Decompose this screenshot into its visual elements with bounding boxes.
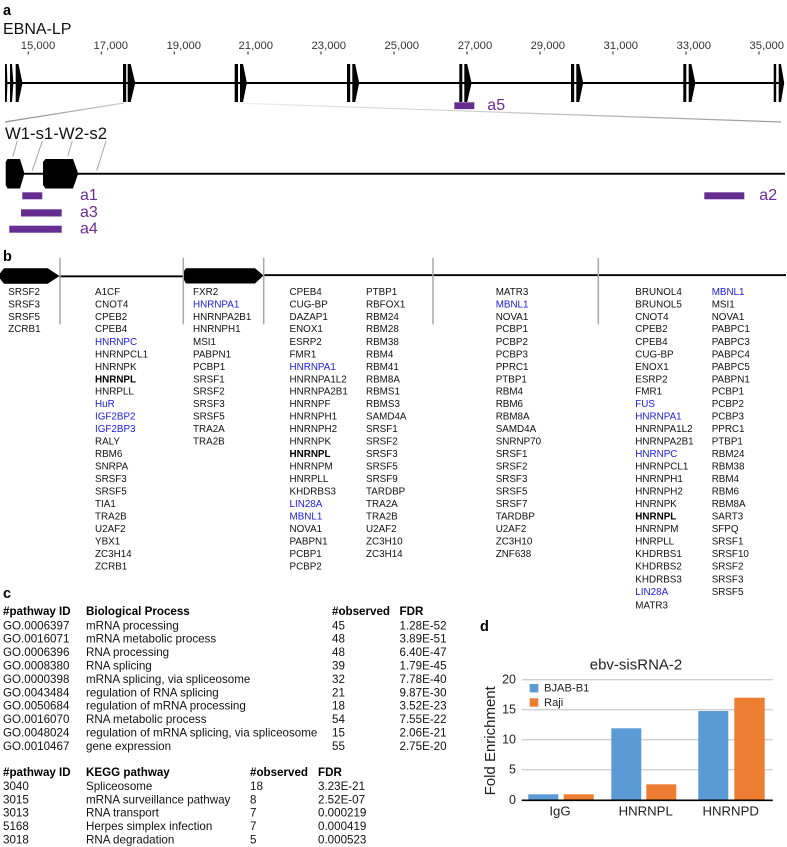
- gene list column 3: TRA2A: [193, 424, 225, 435]
- gene list column 8: RBM8A: [712, 499, 746, 510]
- panel label b: b: [3, 249, 12, 265]
- table: biological process enrichment: Biological Process: [86, 605, 190, 618]
- table: KEGG pathway enrichment: 7: [250, 820, 256, 833]
- table: KEGG pathway enrichment: 3.23E-21: [318, 780, 365, 793]
- gene list column 6: [496, 287, 542, 560]
- gene list column 8: [712, 287, 750, 598]
- gene list column 2: YBX1: [95, 536, 120, 547]
- gene list column 3: PCBP1: [193, 362, 225, 373]
- gene list column 6: MATR3: [496, 287, 529, 298]
- gene list column 5: SRSF2: [366, 437, 398, 448]
- table: biological process enrichment: 48: [332, 633, 345, 646]
- gene list column 7: BRUNOL4: [635, 287, 682, 298]
- table: biological process enrichment: 48: [332, 646, 345, 659]
- gene list column 5: RBM8A: [366, 374, 400, 385]
- gene list column 6: ZC3H10: [496, 536, 533, 547]
- table: biological process enrichment: regulation of mRNA splicing, via spliceosome: [86, 726, 317, 740]
- genome coordinate axis: 25,000: [384, 40, 419, 52]
- gene list column 2: ZCRB1: [95, 561, 127, 572]
- gene list column 6: MBNL1: [496, 300, 529, 310]
- y axis labels: 10: [502, 732, 516, 746]
- gene list column 8: PPRC1: [712, 424, 745, 435]
- y axis labels: 0: [509, 793, 516, 807]
- table: biological process enrichment: 18: [332, 700, 345, 713]
- x axis labels: HNRNPL: [619, 804, 673, 819]
- table: KEGG pathway enrichment: 0.000419: [318, 820, 366, 833]
- zoomed exon track W1 W2: [6, 159, 785, 188]
- table: biological process enrichment: regulation of mRNA processing: [86, 700, 246, 713]
- gene list column 2: IGF2BP2: [95, 412, 136, 423]
- gene list column 3: FXR2: [193, 287, 218, 298]
- gene list column 6: PCBP1: [496, 324, 528, 335]
- gene list column 8: SART3: [712, 512, 744, 522]
- gene list column 3: HNRNPH1: [193, 324, 241, 335]
- marker a2: [704, 187, 777, 204]
- gene list column 6: SRSF1: [496, 449, 527, 460]
- table: biological process enrichment: 3.89E-51: [400, 633, 447, 646]
- table: biological process enrichment: [3, 605, 447, 753]
- gene list column 5: [366, 287, 407, 560]
- table: biological process enrichment: GO.0043484: [3, 686, 70, 699]
- legend: Raji: [544, 697, 563, 709]
- gene list column 8: SFPQ: [712, 524, 739, 535]
- table: biological process enrichment: regulation of RNA splicing: [86, 686, 219, 699]
- gene list column 7: HNRNPL: [635, 512, 676, 522]
- table: KEGG pathway enrichment: Spliceosome: [86, 780, 152, 793]
- gene list column 3: TRA2B: [193, 437, 225, 448]
- gene list column 8: RBM38: [712, 462, 745, 473]
- table: biological process enrichment: GO.0048024: [3, 726, 70, 740]
- gene list column 7: ENOX1: [635, 362, 669, 373]
- genome coordinate axis: 27,000: [458, 40, 492, 52]
- gene list column 6: SRSF3: [496, 474, 528, 485]
- markers a1 a3 a4: a4: [80, 220, 98, 238]
- gene list column 2: ZC3H14: [95, 549, 132, 560]
- panel label c: c: [3, 586, 11, 602]
- gene list column 4: NOVA1: [290, 524, 322, 535]
- gene list column 1: [8, 287, 41, 335]
- markers a1 a3 a4: a3: [80, 204, 98, 221]
- gene list column 2: CPEB4: [95, 324, 128, 335]
- gene list column 2: U2AF2: [95, 524, 126, 535]
- gene list column 4: PCBP1: [290, 549, 322, 560]
- gene list column 6: SNRNP70: [496, 437, 542, 448]
- gene list column 3: HNRNPA2B1: [193, 312, 251, 323]
- table: biological process enrichment: 21: [332, 686, 345, 699]
- gene list column 3: SRSF5: [193, 412, 225, 423]
- gene list column 4: PCBP2: [290, 561, 322, 572]
- gene list column 8: SRSF1: [712, 536, 743, 547]
- genome coordinate axis: 19,000: [166, 40, 201, 52]
- gene list column 4: CUG-BP: [290, 300, 328, 310]
- gene list column 2: HuR: [95, 399, 115, 410]
- gene list column 6: PCBP2: [496, 337, 528, 348]
- gene list column 3: SRSF1: [193, 374, 225, 385]
- table: biological process enrichment: 1.28E-52: [400, 619, 447, 632]
- gene list column 8: RBM6: [712, 486, 740, 498]
- gene list column 6: SRSF7: [496, 499, 527, 510]
- table: biological process enrichment: mRNA processing: [86, 619, 179, 632]
- gene list column 8: PABPN1: [712, 374, 750, 385]
- gene list column 4: FMR1: [290, 349, 316, 360]
- gene list column 7: KHDRBS3: [635, 574, 682, 585]
- gene list column 7: HNRNPA2B1: [635, 437, 694, 448]
- gene list column 5: RBM38: [366, 337, 399, 348]
- gene list column 8: SRSF5: [712, 587, 744, 598]
- gene list column 8: NOVA1: [712, 312, 744, 323]
- x axis labels: [549, 804, 759, 819]
- gene list column 7: FUS: [635, 399, 655, 410]
- gene list column 5: ZC3H14: [366, 549, 403, 560]
- table: biological process enrichment: 2.75E-20: [400, 740, 447, 753]
- gene list column 7: ESRP2: [635, 374, 668, 385]
- gene list column 5: TARDBP: [366, 486, 406, 498]
- gene list column 2: CNOT4: [95, 300, 129, 310]
- gene list column 2: SRSF5: [95, 486, 127, 498]
- gene list column 6: RBM4: [496, 387, 524, 398]
- x axis labels: IgG: [549, 804, 571, 819]
- table: biological process enrichment: GO.0010467: [3, 740, 69, 753]
- gene list column 5: TRA2B: [366, 512, 398, 522]
- gene list column 5: RBFOX1: [366, 300, 405, 310]
- gene list column 3: [193, 287, 251, 448]
- gene list column 7: HNRNPM: [635, 524, 679, 535]
- gene list column 2: SNRPA: [95, 462, 129, 473]
- gene list column 5: SRSF1: [366, 424, 398, 435]
- gene list column 1: SRSF2: [8, 287, 40, 298]
- gene list column 7: BRUNOL5: [635, 300, 682, 310]
- gene list column 5: SRSF3: [366, 449, 398, 460]
- gene list column 2: HNRNPCL1: [95, 349, 148, 360]
- table: biological process enrichment: GO.0016070: [3, 713, 69, 726]
- panel label d: d: [480, 619, 489, 635]
- table: biological process enrichment: 45: [332, 619, 345, 632]
- gene list column 2: SRSF3: [95, 474, 127, 485]
- gene list column 6: ZNF638: [496, 549, 532, 560]
- table: biological process enrichment: 32: [332, 673, 345, 686]
- gene list column 5: PTBP1: [366, 287, 397, 298]
- gene list column 4: HNRNPA1: [290, 362, 336, 373]
- table: KEGG pathway enrichment: 8: [250, 793, 256, 806]
- y axis labels: 20: [502, 672, 516, 686]
- table: KEGG pathway enrichment: KEGG pathway: [86, 766, 170, 779]
- table: biological process enrichment: RNA metabolic process: [86, 713, 207, 726]
- gene list column 7: HNRNPA1L2: [635, 424, 693, 435]
- gene list column 8: PCBP1: [712, 387, 744, 398]
- table: biological process enrichment: mRNA splicing, via spliceosome: [86, 673, 250, 686]
- gene list column 5: RBM28: [366, 324, 399, 335]
- gene list column 4: HNRNPA2B1: [290, 387, 348, 398]
- gene list column 4: PABPN1: [290, 536, 328, 547]
- gene list column 4: HNRNPA1L2: [290, 374, 347, 385]
- gene list column 2: CPEB2: [95, 312, 127, 323]
- bars: [528, 698, 765, 800]
- gene list column 7: LIN28A: [635, 587, 669, 598]
- gene list column 5: SRSF9: [366, 474, 398, 485]
- gene list column 8: SRSF10: [712, 549, 749, 560]
- gene list column 5: TRA2A: [366, 499, 398, 510]
- gene list column 2: HNRNPK: [95, 362, 137, 373]
- gene list column 7: FMR1: [635, 387, 662, 398]
- table: biological process enrichment: GO.0050684: [3, 700, 70, 713]
- gene list column 6: SRSF2: [496, 462, 527, 473]
- gene list column 4: MBNL1: [290, 512, 322, 522]
- gene list column 3: SRSF3: [193, 399, 225, 410]
- gene list column 7: CNOT4: [635, 312, 669, 323]
- table: KEGG pathway enrichment: [3, 766, 366, 846]
- y axis labels: 15: [502, 702, 516, 716]
- table: KEGG pathway enrichment: 3015: [3, 793, 29, 806]
- gene list column 7: KHDRBS2: [635, 561, 682, 572]
- table: KEGG pathway enrichment: 3018: [3, 833, 29, 846]
- table: KEGG pathway enrichment: 5: [250, 833, 256, 846]
- table: biological process enrichment: RNA processing: [86, 646, 169, 659]
- table: KEGG pathway enrichment: mRNA surveillance pathway: [86, 793, 231, 806]
- gene list column 2: TIA1: [95, 499, 116, 510]
- table: biological process enrichment: 7.55E-22: [400, 713, 447, 726]
- gene list column 6: PPRC1: [496, 362, 529, 373]
- gene list column 7: [635, 287, 694, 612]
- table: biological process enrichment: #pathway ID: [3, 605, 71, 618]
- table: KEGG pathway enrichment: RNA transport: [86, 807, 160, 820]
- gene list column 2: TRA2B: [95, 512, 127, 522]
- table: KEGG pathway enrichment: 2.52E-07: [318, 793, 365, 806]
- markers a1 a3 a4: a1: [80, 187, 98, 204]
- table: biological process enrichment: GO.0016071: [3, 633, 69, 646]
- gene list column 7: CPEB2: [635, 324, 668, 335]
- table: biological process enrichment: GO.0006397: [3, 619, 69, 632]
- table: biological process enrichment: 15: [332, 726, 345, 740]
- gene list column 7: HNRNPA1: [635, 412, 682, 423]
- gene list column 8: MSI1: [712, 300, 735, 310]
- gene list column 6: SAMD4A: [496, 424, 537, 435]
- bar chart: ebv-sisRNA-2 fold enrichment: [482, 656, 773, 819]
- genome coordinate axis: 33,000: [676, 40, 711, 52]
- table: biological process enrichment: 6.40E-47: [400, 646, 447, 659]
- table: biological process enrichment: 1.79E-45: [400, 660, 447, 672]
- gene list column 1: SRSF3: [8, 300, 41, 310]
- gene list column 7: HNRNPK: [635, 499, 677, 510]
- gene list column 4: CPEB4: [290, 287, 322, 298]
- table: biological process enrichment: #observed: [332, 605, 390, 618]
- table: biological process enrichment: 2.06E-21: [400, 726, 447, 740]
- gene list column 2: IGF2BP3: [95, 424, 136, 435]
- genome coordinate axis: 23,000: [312, 40, 346, 52]
- panel label a: a: [3, 3, 12, 19]
- y axis labels: [502, 672, 516, 807]
- gene list column 7: HNRNPH1: [635, 474, 683, 485]
- table: KEGG pathway enrichment: 18: [250, 780, 263, 793]
- gene list column 8: PABPC4: [712, 349, 750, 360]
- table: KEGG pathway enrichment: #pathway ID: [3, 766, 71, 779]
- marker a2: a2: [759, 187, 777, 204]
- table: biological process enrichment: FDR: [400, 605, 424, 618]
- heading: EBNA-LP: EBNA-LP: [3, 21, 71, 38]
- gene list column 3: PABPN1: [193, 349, 231, 360]
- gene list column 6: PCBP3: [496, 349, 529, 360]
- table: KEGG pathway enrichment: RNA degradation: [86, 833, 174, 846]
- gene list column 4: [290, 287, 348, 572]
- gene list column 7: HNRPLL: [635, 536, 675, 547]
- gene list column 4: KHDRBS3: [290, 486, 337, 498]
- legend: BJAB-B1: [544, 682, 589, 694]
- panel b gene structure: [0, 258, 786, 324]
- gene list column 6: SRSF5: [496, 486, 528, 498]
- gene list column 7: HNRNPCL1: [635, 462, 688, 473]
- gene list column 4: HNRNPH2: [290, 424, 337, 435]
- gene list column 2: HNRPLL: [95, 387, 134, 398]
- gene list column 5: RBM24: [366, 312, 399, 323]
- gene list column 2: HNRNPL: [95, 374, 136, 385]
- gene list column 2: HNRNPC: [95, 337, 137, 348]
- gene list column 2: RBM6: [95, 449, 123, 460]
- gene list column 2: [95, 287, 148, 572]
- genome coordinate axis: 31,000: [604, 40, 638, 52]
- table: biological process enrichment: 3.52E-23: [400, 700, 447, 713]
- table: KEGG pathway enrichment: 0.000523: [318, 833, 366, 846]
- genome coordinate axis: 15,000: [21, 40, 55, 52]
- gene list column 4: DAZAP1: [290, 312, 328, 323]
- table: KEGG pathway enrichment: FDR: [318, 766, 342, 779]
- gene list column 7: MATR3: [635, 600, 668, 612]
- table: biological process enrichment: 54: [332, 713, 345, 726]
- gene list column 4: HNRNPM: [290, 462, 333, 473]
- gene list column 4: ENOX1: [290, 324, 323, 335]
- exon leader lines: [13, 141, 106, 171]
- y axis title: Fold Enrichment: [482, 685, 499, 795]
- chart title: ebv-sisRNA-2: [590, 656, 682, 673]
- gene list column 8: PCBP2: [712, 399, 744, 410]
- gene list column 7: CPEB4: [635, 337, 668, 348]
- gene list column 8: PCBP3: [712, 412, 745, 423]
- table: KEGG pathway enrichment: 5168: [3, 820, 29, 833]
- table: biological process enrichment: 7.78E-40: [400, 673, 447, 686]
- gene list column 5: ZC3H10: [366, 536, 403, 547]
- gene list column 8: RBM24: [712, 449, 745, 460]
- gene list column 4: HNRNPL: [290, 449, 331, 460]
- gene list column 4: HNRPLL: [290, 474, 329, 485]
- gene list column 4: ESRP2: [290, 337, 322, 348]
- gene list column 5: RBM41: [366, 362, 399, 373]
- gene list column 1: ZCRB1: [8, 324, 41, 335]
- gene list column 7: CUG-BP: [635, 349, 674, 360]
- marker a5: [454, 97, 505, 114]
- y axis labels: 5: [509, 762, 516, 776]
- x axis labels: HNRNPD: [702, 804, 759, 819]
- gene list column 5: SRSF5: [366, 462, 398, 473]
- gene list column 6: U2AF2: [496, 524, 526, 535]
- table: KEGG pathway enrichment: Herpes simplex infection: [86, 820, 212, 833]
- gene list column 8: PABPC5: [712, 362, 750, 373]
- table: KEGG pathway enrichment: 3040: [3, 780, 29, 793]
- gene list column 7: HNRNPH2: [635, 486, 683, 498]
- gene list column 8: RBM4: [712, 474, 740, 485]
- gene list column 5: U2AF2: [366, 524, 397, 535]
- gene list column 8: SRSF3: [712, 574, 744, 585]
- EBNA-LP gene track with exon arrows: [5, 64, 784, 102]
- gene list column 6: PTBP1: [496, 374, 527, 385]
- gene list column 8: PTBP1: [712, 437, 743, 448]
- gene list column 5: RBMS3: [366, 399, 400, 410]
- gene list column 6: RBM8A: [496, 412, 530, 423]
- genome coordinate axis: 35,000: [750, 40, 784, 52]
- zoom connector lines: [5, 103, 781, 122]
- gene list column 1: SRSF5: [8, 312, 41, 323]
- gene list column 7: KHDRBS1: [635, 549, 682, 560]
- gene list column 5: RBMS1: [366, 387, 400, 398]
- genome coordinate axis: 29,000: [530, 40, 565, 52]
- gene list column 5: RBM4: [366, 349, 394, 360]
- genome coordinate axis: [21, 40, 784, 54]
- gene list column 8: PABPC1: [712, 324, 750, 335]
- legend: [530, 682, 589, 709]
- gene list column 6: TARDBP: [496, 512, 535, 522]
- gene list column 4: LIN28A: [290, 499, 323, 510]
- marker a5: a5: [487, 97, 505, 114]
- table: biological process enrichment: GO.0006396: [3, 646, 69, 659]
- gene list column 2: A1CF: [95, 287, 120, 298]
- gene list column 8: MBNL1: [712, 287, 745, 298]
- gene list column 6: NOVA1: [496, 312, 528, 323]
- table: biological process enrichment: 55: [332, 740, 345, 753]
- table: biological process enrichment: GO.0000398: [3, 673, 69, 686]
- table: biological process enrichment: 9.87E-30: [400, 686, 447, 699]
- table: biological process enrichment: RNA splicing: [86, 660, 152, 672]
- gene list column 2: RALY: [95, 437, 120, 448]
- gene list column 8: PABPC3: [712, 337, 750, 348]
- table: KEGG pathway enrichment: #observed: [250, 766, 308, 779]
- table: biological process enrichment: 39: [332, 660, 345, 672]
- gene list column 3: SRSF2: [193, 387, 225, 398]
- gene list column 5: SAMD4A: [366, 412, 407, 423]
- gene list column 8: SRSF2: [712, 561, 743, 572]
- gene list column 4: HNRNPK: [290, 437, 332, 448]
- table: biological process enrichment: gene expression: [86, 740, 171, 753]
- gene list column 6: RBM6: [496, 399, 524, 410]
- gene list column 4: HNRNPH1: [290, 412, 337, 423]
- gene list column 4: HNRNPF: [290, 399, 331, 410]
- genome coordinate axis: 17,000: [94, 40, 128, 52]
- gene list column 3: MSI1: [193, 337, 216, 348]
- table: KEGG pathway enrichment: 0.000219: [318, 807, 366, 820]
- gene list column 7: HNRNPC: [635, 449, 677, 460]
- table: biological process enrichment: GO.0008380: [3, 660, 69, 672]
- table: biological process enrichment: mRNA metabolic process: [86, 633, 216, 646]
- gene list column 3: HNRNPA1: [193, 300, 239, 310]
- markers a1 a3 a4: [9, 187, 98, 238]
- table: KEGG pathway enrichment: 7: [250, 807, 256, 820]
- genome coordinate axis: 21,000: [238, 40, 273, 52]
- table: KEGG pathway enrichment: 3013: [3, 807, 29, 820]
- heading: W1-s1-W2-s2: W1-s1-W2-s2: [5, 124, 107, 143]
